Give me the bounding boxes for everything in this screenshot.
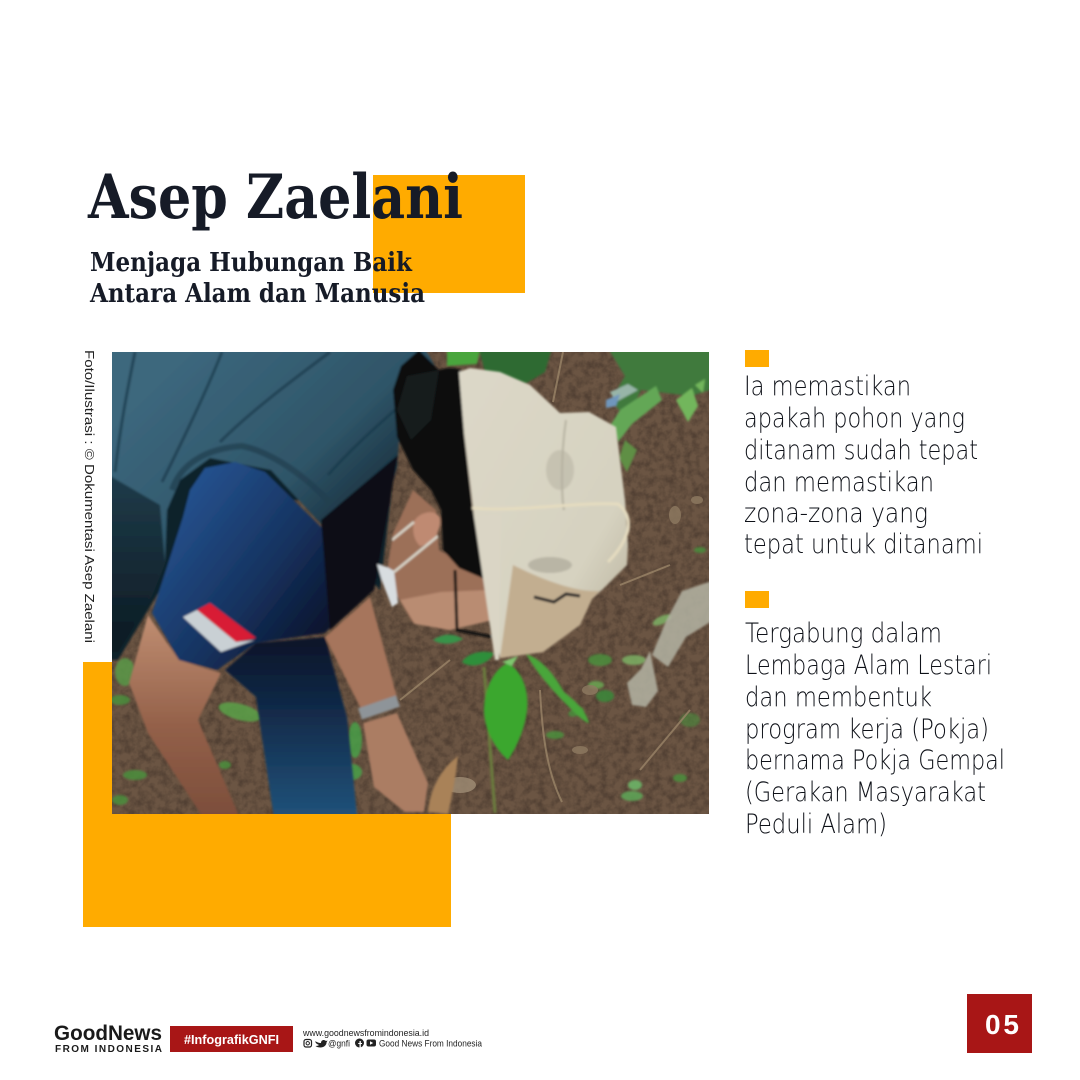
hand bbox=[363, 713, 428, 812]
text block two: Peduli Alam) bbox=[745, 809, 887, 840]
face bbox=[386, 490, 493, 630]
icon: youtube bbox=[366, 1040, 376, 1046]
hat string bbox=[472, 504, 629, 562]
text block two bbox=[745, 618, 1005, 840]
subtitle bbox=[89, 248, 425, 309]
photo credit: Foto/Ilustrasi : © Dokumentasi Asep Zaelani bbox=[82, 350, 97, 643]
website and social handles: @gnfi bbox=[328, 1038, 350, 1050]
text block one bbox=[744, 371, 983, 560]
quilting lines bbox=[113, 352, 398, 510]
text block two: Lembaga Alam Lestari bbox=[745, 650, 992, 681]
text block two: (Gerakan Masyarakat bbox=[745, 777, 986, 808]
title: Asep Zaelani bbox=[87, 162, 463, 233]
ear bbox=[413, 512, 440, 546]
icon: twitter bbox=[315, 1040, 328, 1048]
text block one: zona-zona yang bbox=[744, 498, 928, 529]
text block two: program kerja (Pokja) bbox=[745, 714, 989, 745]
hat logo bbox=[534, 594, 580, 602]
text block two: Tergabung dalam bbox=[745, 618, 942, 649]
right arm bbox=[325, 597, 397, 713]
hat interior bbox=[500, 565, 600, 658]
t-shirt bbox=[152, 462, 378, 670]
dry leaf bbox=[428, 756, 458, 814]
dark back of vest bbox=[112, 457, 392, 662]
leaf litter bbox=[627, 581, 712, 707]
seedling bbox=[433, 635, 589, 813]
icon: facebook bbox=[355, 1038, 364, 1048]
sticks and stones bbox=[400, 352, 690, 802]
hat brim bbox=[474, 515, 501, 660]
page number badge: 05 bbox=[985, 1009, 1019, 1040]
mask straps bbox=[392, 522, 438, 572]
page number badge bbox=[967, 994, 1032, 1053]
logo: GoodNews From Indonesia: FROM INDONESIA bbox=[55, 1044, 162, 1055]
jeans bbox=[225, 637, 358, 825]
text block one: ditanam sudah tepat bbox=[744, 435, 978, 466]
accent block: title bbox=[373, 175, 525, 293]
bullet block: text one bbox=[745, 350, 769, 367]
accent block: photo bbox=[83, 662, 451, 927]
text block one: dan memastikan bbox=[744, 467, 934, 498]
watch bbox=[360, 701, 398, 714]
bullet block: text two bbox=[745, 591, 769, 608]
logo: GoodNews From Indonesia: GoodNews bbox=[54, 1022, 162, 1045]
logo: GoodNews From Indonesia bbox=[54, 1022, 162, 1055]
subtitle: Menjaga Hubungan Baik bbox=[90, 248, 413, 278]
text block one: apakah pohon yang bbox=[744, 403, 965, 434]
hashtag badge bbox=[170, 1026, 293, 1052]
website and social handles bbox=[302, 1028, 483, 1050]
photo: man planting a seedling bbox=[100, 340, 716, 825]
hat bbox=[459, 368, 628, 658]
subtitle: Antara Alam dan Manusia bbox=[89, 279, 425, 309]
background foliage bbox=[110, 345, 716, 805]
text block one: tepat untuk ditanami bbox=[744, 529, 983, 560]
website and social handles: www.goodnewsfromindonesia.id bbox=[302, 1028, 429, 1039]
left arm bbox=[129, 615, 243, 825]
glasses bbox=[455, 570, 493, 637]
text block two: bernama Pokja Gempal bbox=[745, 745, 1005, 776]
hair bbox=[393, 350, 487, 580]
dark shadow under chest bbox=[321, 455, 398, 630]
text block one: Ia memastikan bbox=[744, 371, 911, 402]
website and social handles: Good News From Indonesia bbox=[379, 1038, 483, 1050]
flag patch bbox=[197, 603, 256, 642]
vest bbox=[112, 352, 436, 599]
mask bbox=[377, 564, 398, 607]
hashtag badge: #InfografikGNFI bbox=[184, 1032, 279, 1047]
text block two: dan membentuk bbox=[745, 682, 932, 713]
lower vest shadow bbox=[112, 476, 167, 652]
hat folds bbox=[562, 420, 566, 510]
icon: instagram bbox=[304, 1040, 312, 1047]
figure bbox=[100, 340, 629, 825]
